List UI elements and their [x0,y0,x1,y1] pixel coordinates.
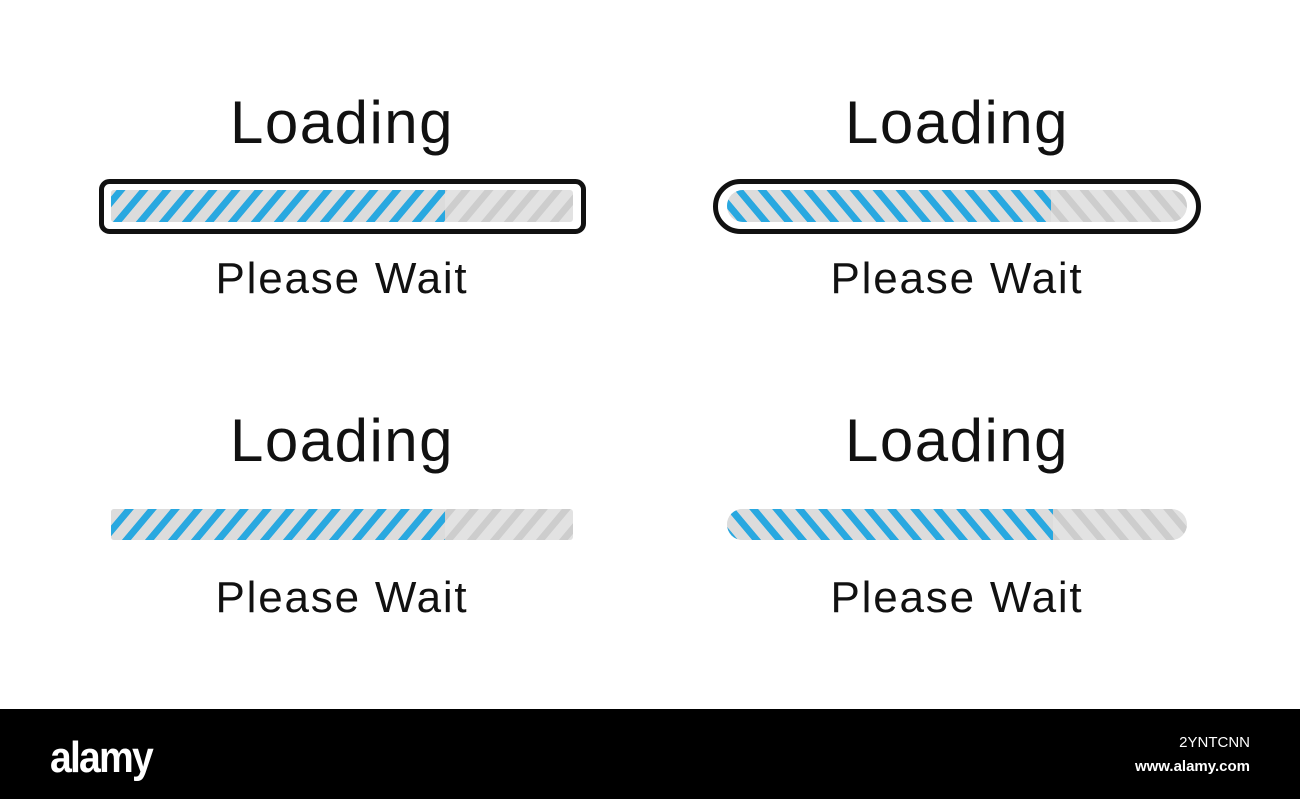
logo: alamy [50,733,154,782]
panel: loader 4 [727,407,1187,622]
panel: loader 1 [102,89,584,303]
image id: 2YNTCNN [1179,734,1250,751]
panel: loader 3 [111,407,573,622]
caption: Please Wait [216,254,468,303]
caption: Please Wait [831,573,1083,622]
heading: Loading [845,89,1069,156]
progress bar 3 [111,509,573,540]
caption: Please Wait [831,254,1083,303]
progress bar 4 [727,509,1187,540]
url: www.alamy.com [1134,758,1250,775]
progress bar 1 [102,182,584,232]
heading: Loading [230,407,454,474]
caption: Please Wait [216,573,468,622]
panel: loader 2 [716,89,1198,303]
heading: Loading [845,407,1069,474]
heading: Loading [230,89,454,156]
progress bar 2 [716,182,1198,232]
footer bar [0,709,1300,799]
